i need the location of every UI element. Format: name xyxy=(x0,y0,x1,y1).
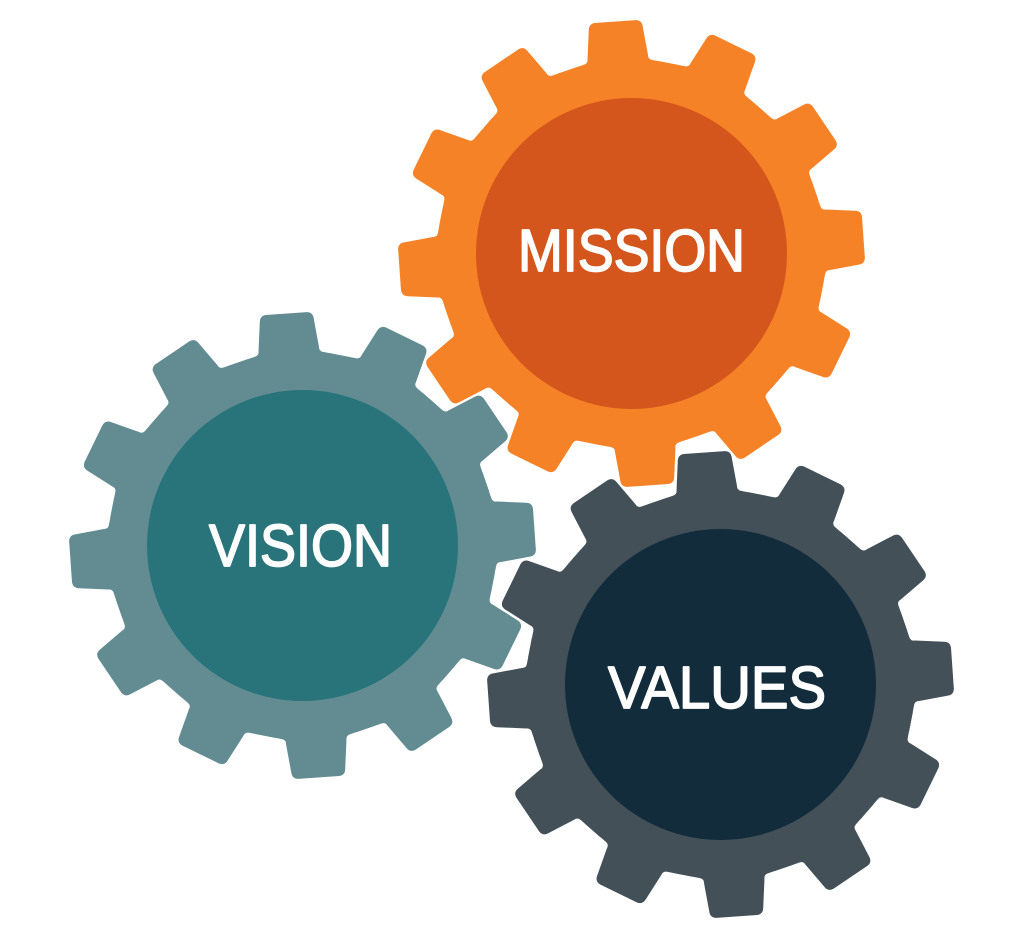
label: mission: MISSION xyxy=(518,218,745,284)
values gear teeth xyxy=(472,436,969,933)
gear: mission xyxy=(383,5,880,502)
mission inner circle xyxy=(476,98,787,409)
vision inner circle xyxy=(147,390,458,701)
mission gear teeth xyxy=(383,5,880,502)
vision gear teeth xyxy=(54,297,551,794)
values inner circle xyxy=(565,529,876,840)
label: vision: VISION xyxy=(209,513,392,579)
gear: values xyxy=(472,436,969,933)
gear: vision xyxy=(54,297,551,794)
label: values: VALUES xyxy=(608,655,826,721)
